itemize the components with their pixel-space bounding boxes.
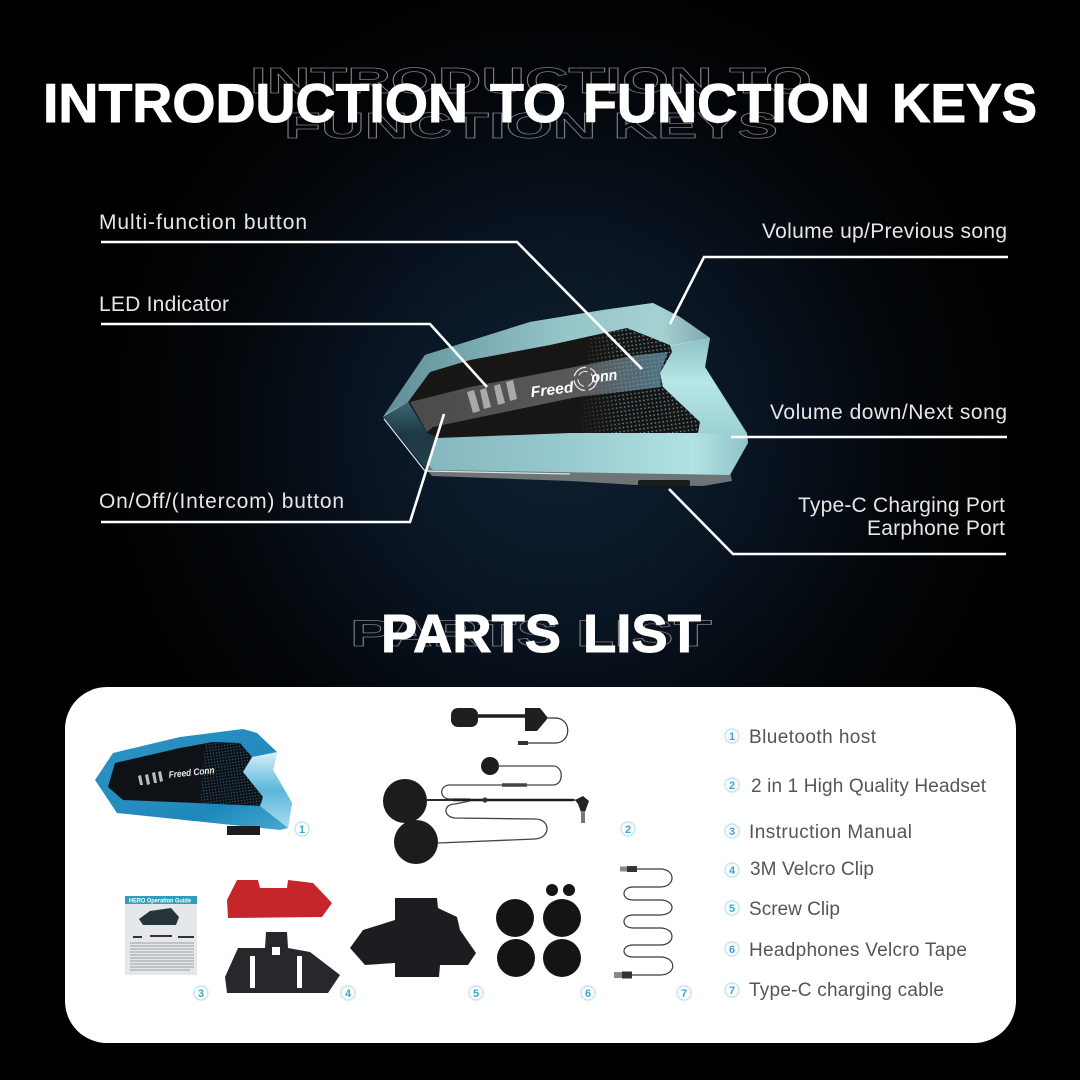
parts legend marker numbers: 1 xyxy=(729,731,735,743)
parts legend marker numbers: 7 xyxy=(729,985,735,997)
parts legend marker numbers: 5 xyxy=(729,903,735,915)
outlined title behind xyxy=(250,60,812,146)
part 3: instruction manual xyxy=(125,896,197,975)
callout labels: Multi-function button xyxy=(99,211,307,234)
parts list heading: LIST xyxy=(583,604,701,664)
outlined title behind: FUNCTION KEYS xyxy=(284,105,778,146)
part 7: Type-C cable xyxy=(614,866,673,978)
part 3: instruction manual: HERO Operation Guide xyxy=(129,898,192,904)
outlined title behind: INTRODUCTION TO xyxy=(250,60,812,101)
parts legend text: Instruction Manual xyxy=(749,822,912,843)
lighter band on panel xyxy=(410,352,668,432)
parts legend text: 2 in 1 High Quality Headset xyxy=(751,776,987,797)
parts legend markers xyxy=(725,729,739,997)
title: INTRODUCTION xyxy=(43,72,468,134)
numbered markers on parts xyxy=(194,822,691,1000)
charging port xyxy=(638,480,690,486)
FreedConn logo xyxy=(528,364,619,401)
marker numbers: 5 xyxy=(473,988,479,1000)
shell left dark bevel xyxy=(383,402,437,468)
FreedConn logo: Freed xyxy=(530,379,575,401)
callout labels: Volume up/Previous song xyxy=(762,220,1007,243)
LED indicator bars xyxy=(467,380,517,413)
part 5: screw clip xyxy=(350,898,476,977)
callout labels xyxy=(99,211,1007,540)
parts legend text: Bluetooth host xyxy=(749,727,877,748)
callout lines xyxy=(101,242,1008,554)
parts legend marker numbers: 6 xyxy=(729,944,735,956)
parts legend marker numbers xyxy=(729,731,736,997)
device bottom edge xyxy=(425,466,732,486)
parts legend text: Screw Clip xyxy=(749,899,840,920)
part 4: red adhesive pad xyxy=(227,880,332,918)
marker numbers: 4 xyxy=(345,988,352,1000)
panel: parts xyxy=(65,687,1016,1043)
marker numbers: 7 xyxy=(681,988,687,1000)
title: FUNCTION xyxy=(583,72,870,134)
parts legend marker numbers: 3 xyxy=(729,826,735,838)
FreedConn logo: onn xyxy=(590,367,618,387)
parts legend text xyxy=(749,727,987,1001)
part 2: microphone with boom xyxy=(451,708,568,745)
part 6: velcro tape discs xyxy=(496,884,581,977)
parts legend text: Type-C charging cable xyxy=(749,980,944,1001)
title xyxy=(43,72,1037,134)
parts list heading: PARTS xyxy=(381,604,561,664)
part 1: Bluetooth host: Freed Conn xyxy=(168,765,215,781)
callout labels: Type-C Charging Port xyxy=(798,494,1005,517)
shell top facet xyxy=(385,303,710,414)
title: TO xyxy=(490,72,566,134)
marker numbers: 1 xyxy=(299,824,305,836)
marker numbers: 6 xyxy=(585,988,591,1000)
parts list heading xyxy=(381,604,701,664)
part 2: headset xyxy=(383,757,589,864)
device: Bluetooth host large view xyxy=(383,303,748,486)
callout labels: LED Indicator xyxy=(99,293,229,316)
callout labels: On/Off/(Intercom) button xyxy=(99,490,344,513)
marker numbers: 3 xyxy=(198,988,204,1000)
device shell lower band xyxy=(383,303,748,475)
parts legend marker numbers: 4 xyxy=(729,865,736,877)
marker numbers xyxy=(198,824,687,1000)
outlined parts list heading behind: PARTS LIST xyxy=(350,613,713,654)
shell right highlight xyxy=(660,338,747,436)
parts legend text: 3M Velcro Clip xyxy=(750,859,874,880)
bevel edge highlight xyxy=(384,419,570,474)
display panel xyxy=(408,328,700,438)
marker numbers: 2 xyxy=(625,824,631,836)
part 4: velcro clip plate xyxy=(225,932,340,993)
parts legend text: Headphones Velcro Tape xyxy=(749,940,967,961)
title: KEYS xyxy=(892,72,1037,134)
part 1: Bluetooth host xyxy=(95,729,292,835)
callout labels: Volume down/Next song xyxy=(770,401,1007,424)
dot pattern on panel xyxy=(580,328,700,433)
callout labels: Earphone Port xyxy=(867,517,1005,540)
parts legend marker numbers: 2 xyxy=(729,780,735,792)
